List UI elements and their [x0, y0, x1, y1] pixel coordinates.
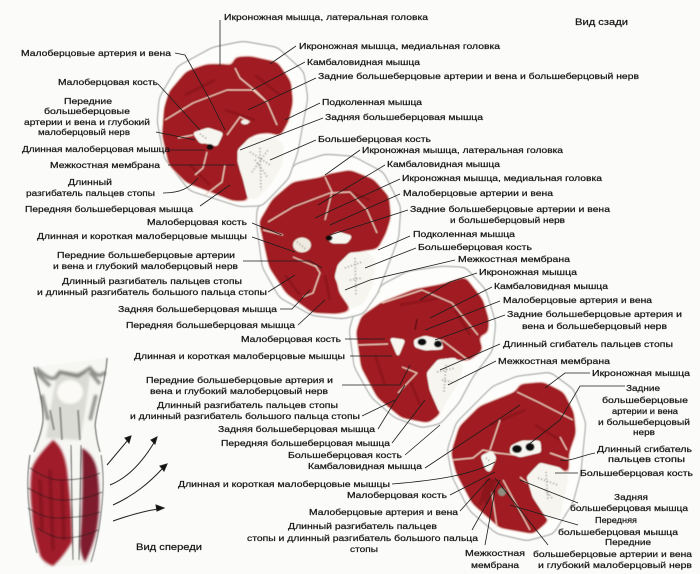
label: Межкостная мембрана — [458, 254, 570, 264]
label: anterior vessels: малоберцовый нерв — [38, 127, 131, 137]
label: Задние большеберцовые артерии и вена и большеберцовый нерв — [318, 71, 640, 81]
label: extensors: стопы и длинный разгибатель большого пальца — [247, 533, 478, 543]
label: posterior vessels: большеберцовые — [602, 395, 688, 405]
label: extensors — [130, 400, 360, 421]
label: posterior vessels: нерв — [633, 427, 656, 437]
label: anterior vessels: Передние большеберцовые артерия и — [146, 375, 333, 385]
label: extensors: стопы — [350, 544, 378, 554]
view label: back: Вид сзади — [575, 17, 628, 28]
label: Икроножная мышца — [592, 368, 690, 378]
label: anterior vessels: большеберцовые артерии и вена — [533, 549, 692, 559]
label: Малоберцовая кость — [241, 334, 342, 344]
label: anterior vessels — [24, 96, 150, 137]
label: anterior vessels: вена и глубокий малоберцовый нерв — [150, 386, 329, 396]
label: Малоберцовая кость — [147, 217, 248, 227]
label: anterior vessels: и глубокий малоберцовый нерв — [538, 560, 693, 570]
label: Подколенная мышца — [322, 97, 422, 107]
label: extensors — [247, 521, 478, 554]
label: extensors: Длинный разгибатель пальцев стопы — [62, 276, 242, 286]
label: Малоберцовая кость — [347, 490, 448, 500]
label: Камбаловидная мышца — [494, 281, 608, 291]
front view of the leg — [28, 358, 107, 567]
cross-section 1: highest level — [158, 42, 307, 206]
label: Большеберцовая кость — [580, 468, 694, 478]
label: anterior vessels: и вена и глубокий малоберцовый нерв — [53, 261, 239, 271]
label: anterior vessels — [53, 250, 239, 271]
cross-section 2 — [257, 155, 400, 318]
label: extensor — [26, 177, 155, 198]
label: Икроножная мышца, медиальная головка — [299, 41, 500, 51]
label: anterior vessels: Передние — [605, 537, 651, 547]
label: Малоберцовая кость — [58, 77, 159, 87]
labels: section 2 — [37, 145, 610, 330]
label: flexor: Длинный сгибатель — [597, 444, 693, 454]
label: Большеберцовая кость — [288, 450, 403, 460]
arrow: to section 4 — [113, 505, 164, 521]
label: posterior vessels: вена и большеберцовый нерв — [522, 321, 668, 331]
label: extensors: Длинный разгибатель пальцев — [288, 521, 438, 531]
label: Длинная и короткая малоберцовые мышцы — [178, 479, 390, 489]
label: anterior vessels: артерии и вена и глубокий — [24, 117, 150, 127]
label: membrane: Межкостная — [465, 548, 525, 558]
label: Малоберцовые артерия и вена — [21, 48, 171, 58]
label: flexor: пальцев стопы — [608, 454, 685, 464]
label: Длинный сгибатель пальцев стопы — [503, 339, 673, 349]
label: Большеберцовая кость — [318, 134, 432, 144]
arrow: to section 2 — [110, 437, 157, 485]
label: posterior vessels: Задние большеберцовые артерия и — [507, 309, 682, 319]
label: Малоберцовые артерия и вена — [503, 295, 652, 305]
label: Длинная и короткая малоберцовые мышцы — [134, 351, 345, 361]
label: Передняя большеберцовая мышца — [221, 438, 390, 448]
label: Икроножная мышца, латеральная головка — [224, 12, 428, 22]
label: posterior vessels — [507, 309, 682, 331]
view label: front: Вид спереди — [136, 542, 202, 553]
label: posterior vessels: и большеберцовый нерв — [450, 215, 566, 225]
labels: section 4 — [178, 368, 694, 570]
label: posterior vessels — [410, 204, 610, 225]
label: Икроножная мышца — [479, 267, 577, 277]
label: extensors: Длинный разгибатель пальцев стопы — [157, 400, 338, 410]
label: posterior vessels: Задние — [626, 383, 660, 393]
label: Камбаловидная мышца — [387, 159, 500, 169]
leader lines — [156, 20, 625, 545]
label: anterior tibial muscle: Передняя — [595, 515, 637, 525]
label: Икроножная мышца, латеральная головка — [362, 145, 563, 155]
label: Малоберцовые артерии и вена — [403, 188, 553, 198]
label: posterior tibial muscle: большеберцовая мышца — [570, 503, 688, 513]
cross-section 4: lowest level — [448, 373, 585, 540]
label: anterior tibial muscle — [558, 515, 678, 537]
arrow: to section 3 — [113, 464, 167, 505]
label: anterior vessels: большеберцовые — [44, 106, 130, 116]
label: Задняя большеберцовая мышца — [118, 304, 277, 314]
label: anterior vessels — [533, 537, 693, 570]
label: extensors: и длинный разгибатель большого пальца стопы — [130, 411, 360, 421]
label: Задняя большеберцовая мышца — [325, 112, 483, 122]
label: extensor: разгибатель пальцев стопы — [26, 188, 155, 198]
label: Межкостная мембрана — [498, 356, 610, 366]
label: Передняя большеберцовая мышца — [126, 320, 295, 330]
label: posterior vessels — [598, 383, 690, 437]
label: Длинная малоберцовая мышца — [22, 144, 170, 154]
label: membrane: мембрана — [471, 560, 519, 570]
arrow: to section 1 — [107, 436, 131, 465]
label: posterior vessels: Задние большеберцовые артерии и вена — [410, 204, 610, 214]
label: anterior vessels: Передние — [64, 96, 112, 106]
label: anterior vessels — [146, 375, 333, 396]
arrows to cross-sections — [107, 436, 167, 521]
label: anterior vessels: Передние большеберцовые артерии — [57, 250, 235, 260]
label: anterior tibial muscle: большеберцовая мышца — [558, 527, 678, 537]
label: Задняя большеберцовая мышца — [218, 424, 375, 434]
label: membrane — [465, 548, 525, 570]
label: extensors: и длинный разгибатель большого пальца стопы — [37, 287, 267, 297]
label: Подколенная мышца — [413, 229, 515, 239]
label: Межкостная мембрана — [50, 160, 160, 170]
label: Большеберцовая кость — [418, 242, 533, 252]
label: Камбаловидная мышца — [308, 461, 422, 471]
label: Икроножная мышца, медиальная головка — [402, 173, 602, 183]
label: posterior tibial muscle: Задняя — [614, 492, 648, 502]
label: posterior vessels: артерии и вена — [612, 406, 678, 416]
label: Камбаловидная мышца — [307, 57, 420, 67]
label: Передняя большеберцовая мышца — [25, 204, 193, 214]
labels: section 1 — [21, 12, 640, 214]
label: Малоберцовые артерия и вена — [309, 507, 458, 517]
cross-section 3 — [350, 267, 495, 427]
label: posterior vessels: и большеберцовый — [598, 417, 690, 427]
label: posterior tibial muscle — [570, 492, 688, 513]
label: Длинная и короткая малоберцовые мышцы — [37, 231, 247, 241]
label: extensors — [37, 276, 267, 297]
labels: section 3 — [130, 267, 682, 471]
label: flexor — [597, 444, 693, 464]
label: extensor: Длинный — [68, 177, 112, 187]
